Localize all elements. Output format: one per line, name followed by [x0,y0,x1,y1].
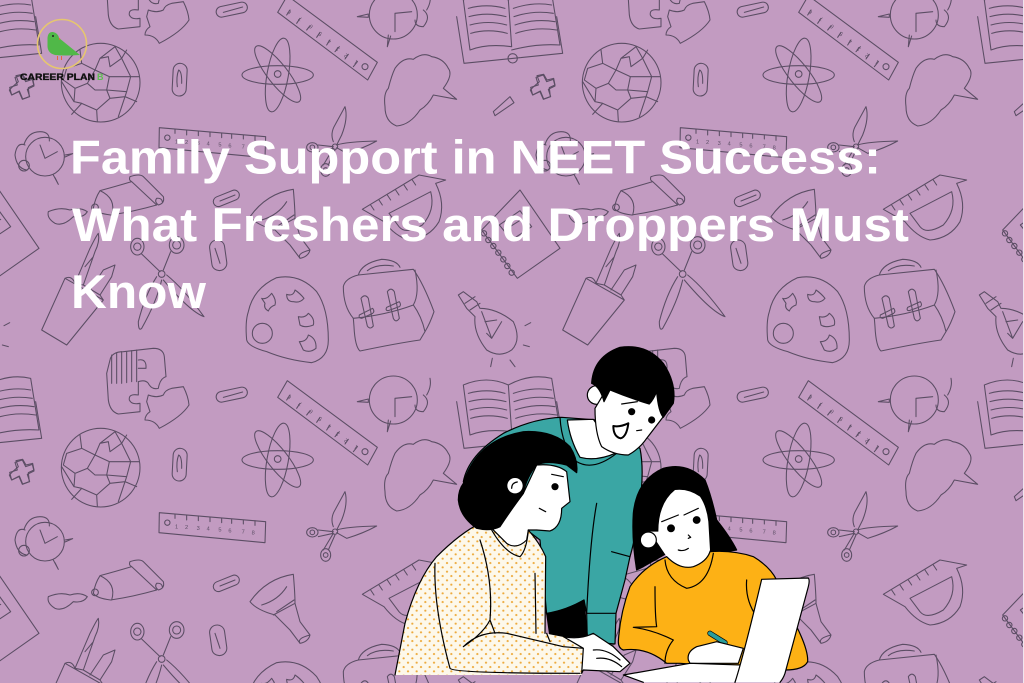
title: Know [71,265,206,318]
figure: man in teal sweater [463,347,674,644]
logo letter B: B [97,72,104,82]
title [70,130,909,318]
illustration: family around a laptop [395,347,809,682]
figure: girl in yellow sweater [618,467,808,670]
icon: green bird [48,32,80,60]
title: What Freshers and Droppers Must [72,198,909,251]
figure: mother with dotted sweater [395,432,630,675]
right edge sliver [1023,0,1024,683]
laptop [623,578,809,682]
logo wordmark: CAREER PLAN [20,72,95,82]
logo: Career Plan B [20,20,104,82]
title: Family Support in NEET Success: [70,130,881,184]
icon: logo ring [38,20,86,68]
